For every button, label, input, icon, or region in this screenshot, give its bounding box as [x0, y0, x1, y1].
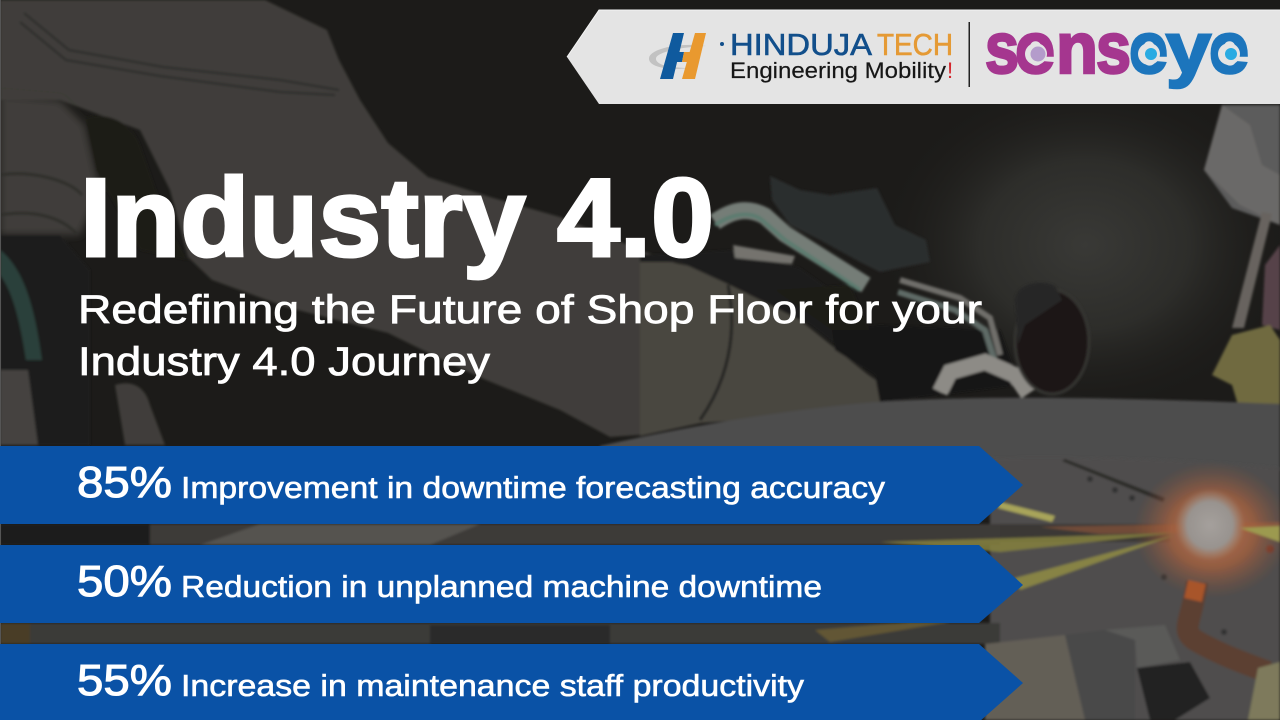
gray band [600, 398, 1280, 470]
subtitle: Industry 4.0 Journey [78, 340, 490, 384]
Senseye wordmark: n [1056, 9, 1098, 89]
cables [715, 211, 866, 285]
dome of the arm [640, 261, 881, 436]
dark joint cavity [85, 116, 188, 260]
stat banner: 55%: 55% [77, 656, 172, 705]
dark block beneath the cables [832, 325, 1020, 402]
lower plate and sparks [0, 457, 1280, 720]
grooves on the arm [24, 13, 339, 90]
Senseye wordmark: y [1166, 9, 1211, 89]
title: Industry 4.0 [80, 156, 714, 280]
robot arm body [0, 0, 881, 437]
torch tube [1188, 582, 1268, 672]
stat banner: 85% [0, 446, 1023, 524]
bench items [985, 635, 1095, 720]
right structure [1204, 105, 1280, 225]
stat banner: 50%: Reduction in unplanned machine downtime [181, 569, 822, 604]
Hinduja Tech wordmark: ! [947, 58, 953, 83]
Hinduja Tech wordmark: Engineering Mobility [730, 58, 947, 83]
Hinduja Tech wordmark [720, 27, 953, 83]
Senseye wordmark: e [1209, 9, 1249, 89]
logo banner [567, 9, 1280, 104]
subtitle: Redefining the Future of Shop Floor for your [78, 288, 982, 332]
Senseye wordmark [985, 9, 1249, 89]
stat banner: 50% [0, 545, 1023, 623]
dark gripper [770, 176, 930, 272]
stat banner: 85%: 85% [77, 458, 172, 507]
stat banner: 55% [0, 644, 1023, 720]
Senseye wordmark: s [985, 9, 1019, 89]
Senseye wordmark: e [1015, 9, 1055, 89]
ring [1015, 290, 1089, 394]
Hinduja Tech wordmark: HINDUJA [730, 27, 872, 62]
left cable stack [0, 235, 90, 445]
stat banner: 50%: 50% [77, 557, 172, 606]
Senseye wordmark: e [1129, 9, 1168, 89]
subtitle [78, 288, 982, 384]
Senseye wordmark: s [1096, 9, 1131, 89]
divider [968, 22, 970, 87]
stat banner: 55%: Increase in maintenance staff productivity [181, 668, 805, 703]
Hinduja Tech wordmark: TECH [877, 27, 953, 62]
icon: Hinduja Tech H mark [649, 33, 706, 79]
stat banner: 85%: Improvement in downtime forecasting accuracy [181, 470, 886, 505]
